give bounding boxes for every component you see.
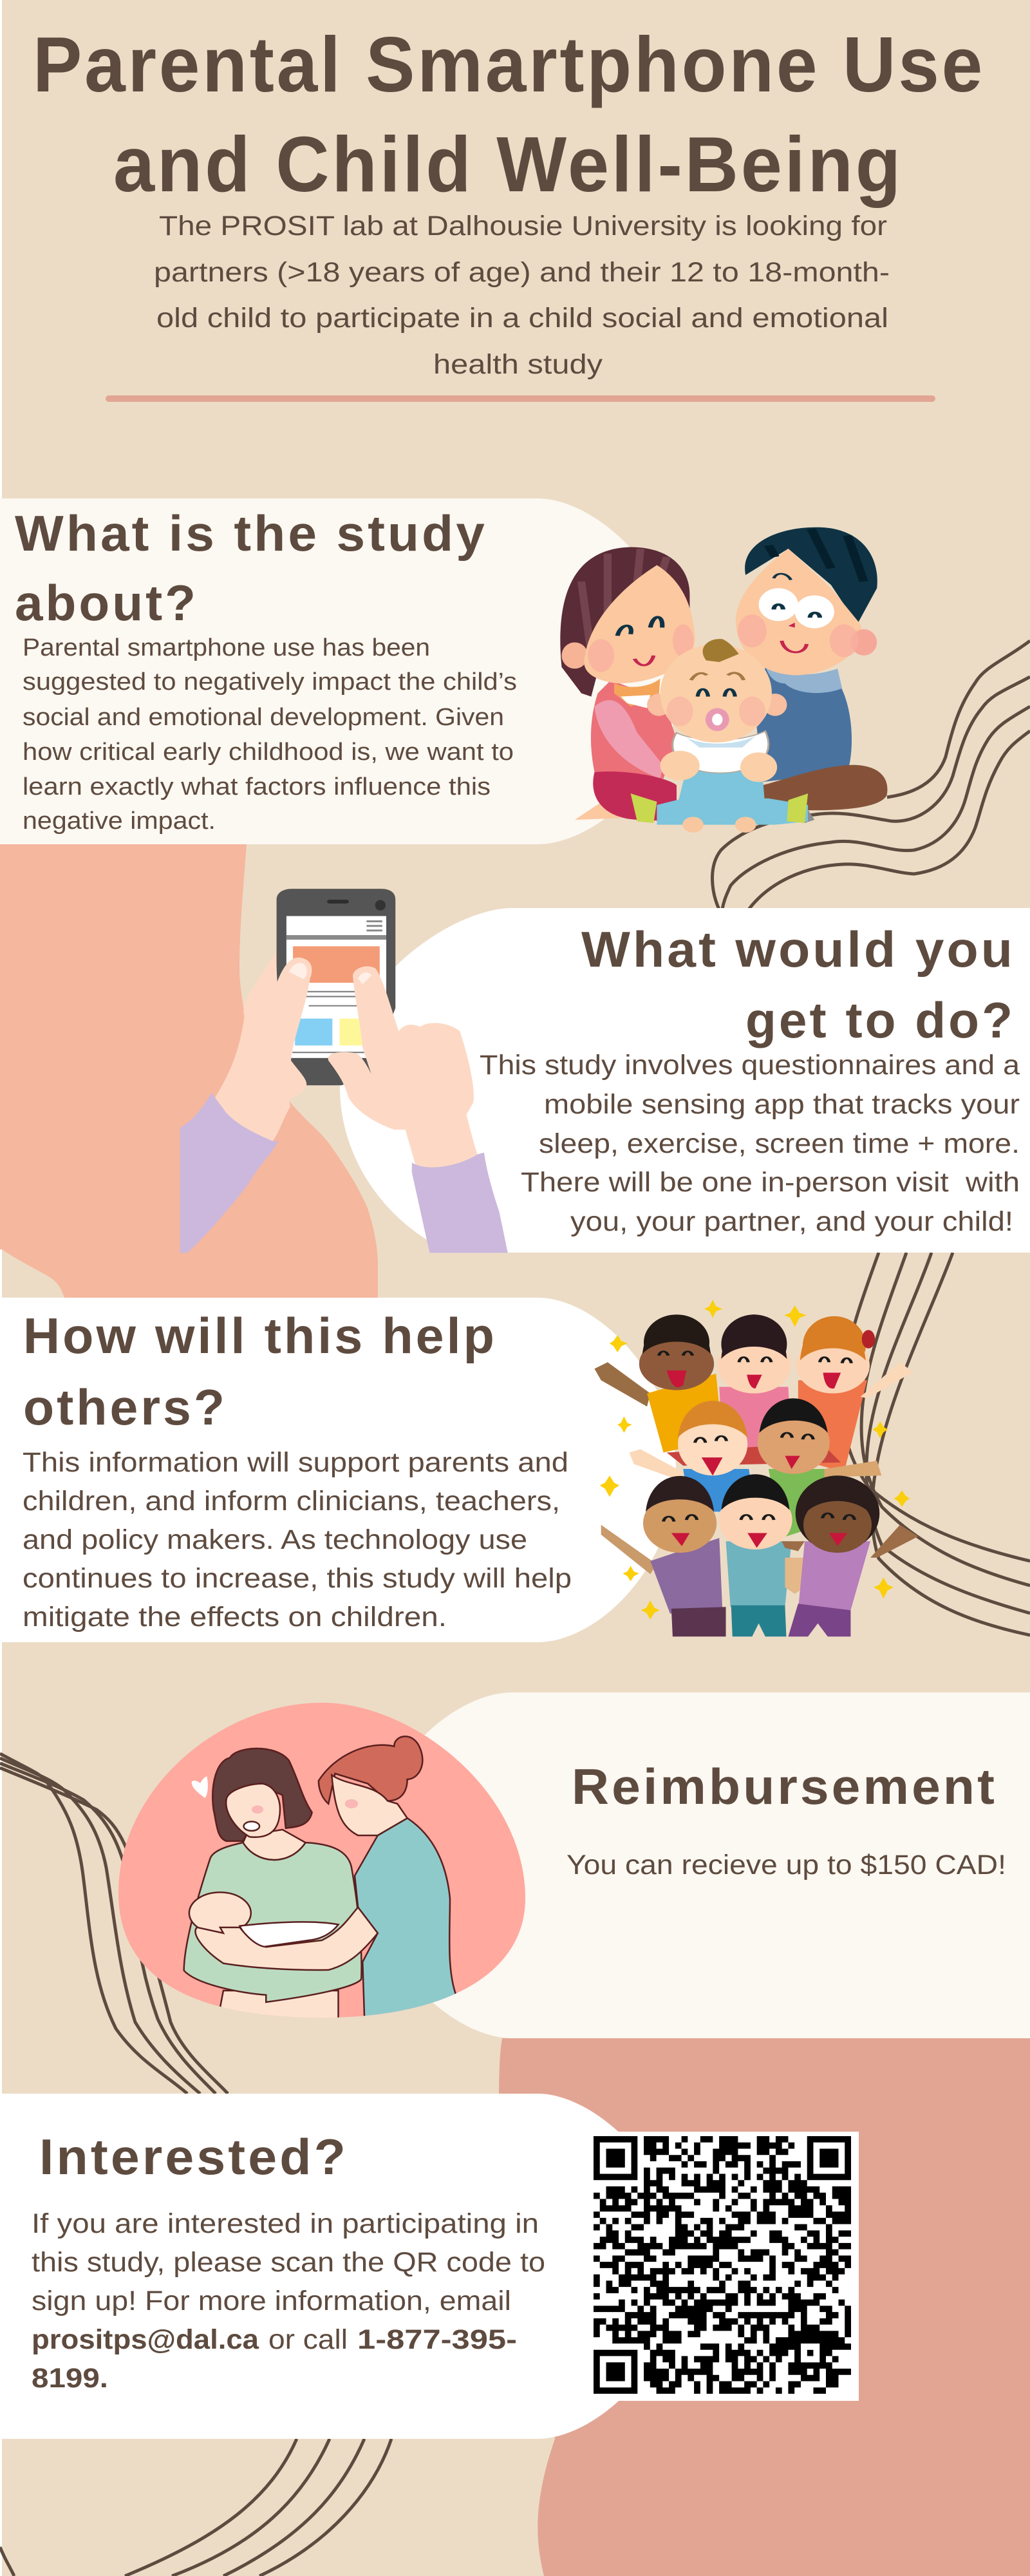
intro text: old child to participate in a child social and emotional (156, 303, 888, 334)
squiggle: left of couple (0, 1754, 228, 2094)
background shape: peach (0, 753, 378, 1298)
body text: study activities: There will be one in-person visit with (521, 1167, 1020, 1198)
title: Parental Smartphone Use (33, 21, 985, 108)
body text: benefits: children, and inform clinicians, teachers, (23, 1486, 560, 1517)
heading: how will this help others (23, 1307, 497, 1435)
illustration: family with baby (560, 527, 887, 833)
body text: study activities (480, 1050, 1020, 1237)
squiggle: top right (712, 641, 1030, 909)
title: and Child Well-Being (113, 120, 903, 208)
body text: reimbursement amount: You can recieve up to $150 CAD! (566, 1850, 1006, 1880)
illustration: group of cheering children (594, 1300, 919, 1636)
body text: contact details: If you are interested in participating in (32, 2208, 539, 2239)
heading: what is the study about: about? (15, 574, 198, 631)
heading: reimbursement: Reimbursement (572, 1758, 997, 1815)
body text: study description: how critical early childhood is, we want to (23, 739, 514, 766)
body text: study activities: you, your partner, and your child! (570, 1206, 1013, 1237)
heading: how will this help others: How will this help (23, 1307, 497, 1364)
heading: how will this help others: others? (23, 1379, 227, 1435)
panel: reimbursement (367, 1692, 1030, 2038)
panel: what would you get to do (340, 908, 1030, 1253)
panel: how will this help others (0, 1298, 676, 1642)
squiggle: behind children (842, 1253, 1030, 1635)
background shape: rose (499, 2038, 1030, 2576)
panel: what is the study about (0, 498, 682, 844)
body text: study description: suggested to negatively impact the child’s (23, 668, 517, 696)
body text: contact details: or call (268, 2324, 348, 2355)
body text: study description: negative impact. (23, 808, 216, 835)
illustration: couple holding newborn (118, 1703, 525, 2022)
body text: contact details (32, 2208, 545, 2394)
illustration: hands holding phone (180, 889, 508, 1253)
heading: what is the study about: What is the study (15, 505, 487, 562)
body text: benefits: mitigate the effects on children. (23, 1602, 447, 1633)
body text: study activities: sleep, exercise, screen time + more. (539, 1128, 1020, 1159)
heading: what is the study about (15, 505, 487, 631)
body text: contact details: this study, please scan the QR code to (32, 2247, 545, 2278)
panel: interested (0, 2094, 682, 2439)
heading: what would you get to do: get to do? (745, 992, 1015, 1048)
body text: benefits: and policy makers. As technology use (23, 1524, 527, 1555)
title (33, 21, 985, 208)
title rule (106, 395, 935, 402)
body text: study description (23, 634, 517, 835)
intro text (154, 211, 890, 380)
body text: study description: social and emotional development. Given (23, 704, 504, 731)
body text: study description: Parental smartphone use has been (23, 634, 430, 661)
intro text: health study (433, 349, 603, 380)
squiggle: bottom (0, 2439, 391, 2576)
heading: what would you get to do: What would you (581, 921, 1015, 978)
body text: benefits: continues to increase, this study will help (23, 1563, 572, 1594)
body text: contact details: prositps@dal.ca (32, 2324, 259, 2355)
body text: contact details: sign up! For more information, email (32, 2286, 511, 2316)
body text: contact details: 1-877-395- (357, 2324, 517, 2355)
QR code (583, 2132, 859, 2401)
body text: study description: learn exactly what factors influence this (23, 773, 491, 800)
body text: study activities: This study involves questionnaires and a (480, 1050, 1020, 1081)
body text: benefits (23, 1447, 572, 1633)
intro text: partners (>18 years of age) and their 12 to 18-month- (154, 257, 890, 288)
intro text: The PROSIT lab at Dalhousie University is looking for (159, 211, 887, 242)
body text: contact details: 8199. (32, 2363, 108, 2394)
body text: study activities: mobile sensing app that tracks your (544, 1089, 1020, 1120)
heading: what would you get to do (581, 921, 1015, 1048)
body text: benefits: This information will support parents and (23, 1447, 568, 1478)
heading: interested: Interested? (39, 2128, 348, 2185)
